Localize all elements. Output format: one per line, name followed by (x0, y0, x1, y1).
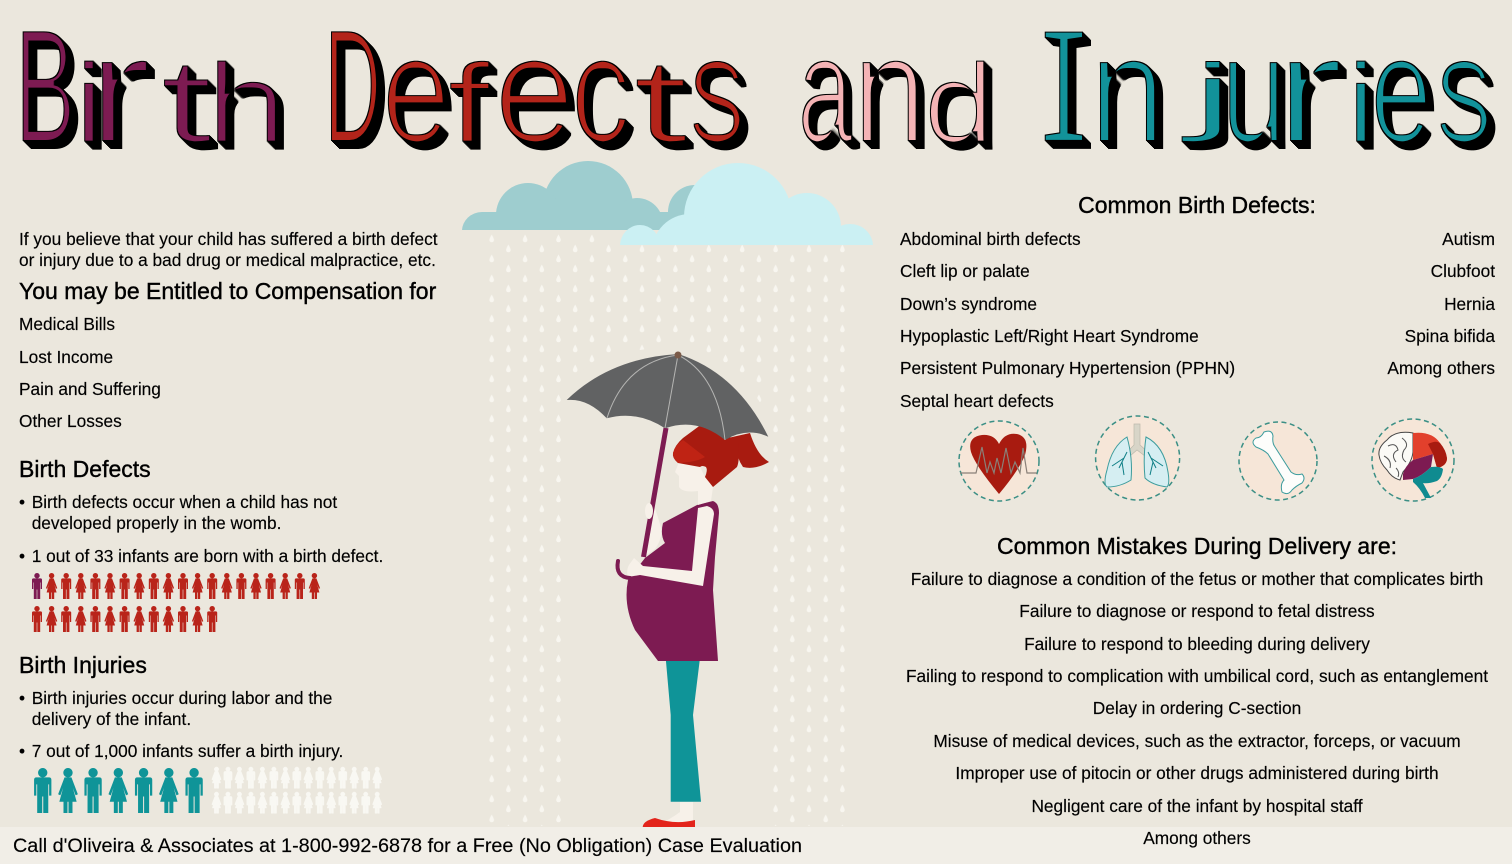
common mistakes list: Failure to diagnose or respond to fetal distress (1019, 601, 1375, 621)
umbrella tip (674, 352, 682, 358)
compensation list: Other Losses (19, 411, 122, 431)
foot (660, 802, 693, 824)
birth injuries facts: • (19, 688, 25, 708)
back cloud (462, 161, 694, 230)
intro text: or injury due to a bad drug or medical malpractice, etc. (19, 250, 436, 270)
intro text: If you believe that your child has suffered a birth defect (19, 229, 438, 249)
title word: Birth: t (158, 34, 215, 168)
common mistakes list: Negligent care of the infant by hospital staff (1031, 796, 1363, 816)
icon: brain (1372, 419, 1454, 501)
umbrella hook (618, 561, 630, 578)
footer call to action: Call d'Oliveira & Associates at 1-800-992-6878 for a Free (No Obligation) Case Evaluation (13, 835, 802, 857)
heading: compensation: You may be Entitled to Compensation for (19, 278, 436, 304)
common birth defects list: Spina bifida (1405, 326, 1495, 346)
birth defects facts: 1 out of 33 infants are born with a birth defect. (32, 546, 383, 566)
title word: Injuries: i (1344, 40, 1378, 167)
common mistakes list: Among others (1143, 828, 1251, 848)
common mistakes list: Failure to diagnose a condition of the fetus or mother that complicates birth (911, 569, 1483, 589)
title (14, 0, 1496, 177)
common birth defects list: Hypoplastic Left/Right Heart Syndrome (900, 326, 1199, 346)
icon: bone (1239, 422, 1317, 500)
title word: Birth (14, 0, 288, 177)
shoe (643, 818, 695, 827)
common mistakes list: Improper use of pitocin or other drugs administered during birth (955, 763, 1439, 783)
compensation list: Pain and Suffering (19, 379, 161, 399)
title word: Birth: i (72, 40, 106, 167)
neck and face (675, 462, 713, 505)
title word: Birth: h (205, 40, 288, 167)
common birth defects list: Septal heart defects (900, 391, 1054, 411)
common birth defects list: Abdominal birth defects (900, 229, 1081, 249)
birth injuries facts: Birth injuries occur during labor and the (32, 688, 332, 708)
title word: Defects: f (446, 40, 491, 167)
birth injuries facts (19, 688, 343, 761)
hand on handle (645, 503, 653, 519)
compensation list (19, 314, 161, 431)
birth defects facts (19, 492, 383, 566)
footer band (0, 827, 1512, 864)
legs (666, 658, 701, 802)
compensation list: Lost Income (19, 347, 113, 367)
common birth defects list: Autism (1442, 229, 1495, 249)
intro text (19, 229, 438, 270)
title word: Defects: t (630, 34, 691, 168)
birth injuries facts: • (19, 741, 25, 761)
common birth defects list: Down’s syndrome (900, 294, 1037, 314)
rain drops (487, 234, 847, 830)
heading: common birth defects: Common Birth Defects: (1078, 192, 1316, 218)
title word: Defects: c (570, 4, 631, 175)
umbrella handle (644, 428, 666, 557)
icon: lungs (1096, 416, 1180, 500)
dress (627, 501, 719, 661)
title word: Defects: s (688, 4, 746, 175)
title word: Defects: e (381, 4, 451, 175)
title word: and: a (797, 4, 853, 175)
birth defects facts: • (19, 546, 25, 566)
heading: birth defects: Birth Defects (19, 456, 151, 482)
ponytail (728, 433, 769, 468)
birth injuries facts: 7 out of 1,000 infants suffer a birth injury. (32, 741, 343, 761)
title word: Birth: B (14, 0, 76, 177)
title word: Injuries (1035, 0, 1496, 176)
birth defects facts: • (19, 492, 25, 512)
hair (673, 424, 739, 487)
front cloud (620, 163, 873, 245)
title word: Injuries: r (1271, 4, 1346, 175)
common mistakes list: Delay in ordering C-section (1093, 698, 1301, 718)
title word: Injuries: n (1089, 4, 1166, 175)
heading: birth injuries: Birth Injuries (19, 652, 147, 678)
common mistakes list: Failure to respond to bleeding during delivery (1024, 634, 1370, 654)
title word: Birth: r (85, 4, 153, 175)
woman (567, 352, 769, 827)
raised arm (645, 505, 661, 556)
title word: and (797, 4, 994, 175)
icon: heart (959, 421, 1039, 501)
common mistakes list: Misuse of medical devices, such as the extractor, forceps, or vacuum (933, 731, 1461, 751)
common birth defects list: Hernia (1444, 294, 1495, 314)
common birth defects list: Clubfoot (1431, 261, 1495, 281)
title word: and: n (852, 4, 927, 175)
birth defects facts: developed properly in the womb. (32, 513, 281, 533)
common birth defects list: Persistent Pulmonary Hypertension (PPHN) (900, 358, 1235, 378)
birth defects facts: Birth defects occur when a child has not (32, 492, 337, 512)
common birth defects list (900, 229, 1496, 411)
heading: common mistakes: Common Mistakes During Delivery are: (997, 533, 1397, 559)
umbrella ribs (607, 355, 725, 440)
common birth defects list: Among others (1387, 358, 1495, 378)
title word: Injuries: j (1184, 46, 1242, 143)
title word: Injuries: s (1435, 4, 1493, 175)
hair fringe (673, 440, 705, 463)
birth injuries facts: delivery of the infant. (32, 709, 191, 729)
compensation list: Medical Bills (19, 314, 115, 334)
common mistakes list (906, 569, 1488, 848)
title word: Defects: e (493, 4, 576, 175)
common mistakes list: Failing to respond to complication with umbilical cord, such as entanglement (906, 666, 1488, 686)
title word: Defects (324, 0, 748, 177)
title word: and: d (923, 40, 994, 167)
common birth defects list: Cleft lip or palate (900, 261, 1030, 281)
title word: Injuries: u (1220, 4, 1287, 175)
arm resting on belly (627, 506, 714, 586)
title word: Injuries: I (1035, 0, 1093, 176)
title word: Defects: D (324, 0, 381, 177)
illustration: rain, clouds and pregnant woman with umbrella (462, 161, 873, 827)
umbrella canopy (567, 354, 768, 440)
title word: Injuries: e (1370, 4, 1432, 175)
